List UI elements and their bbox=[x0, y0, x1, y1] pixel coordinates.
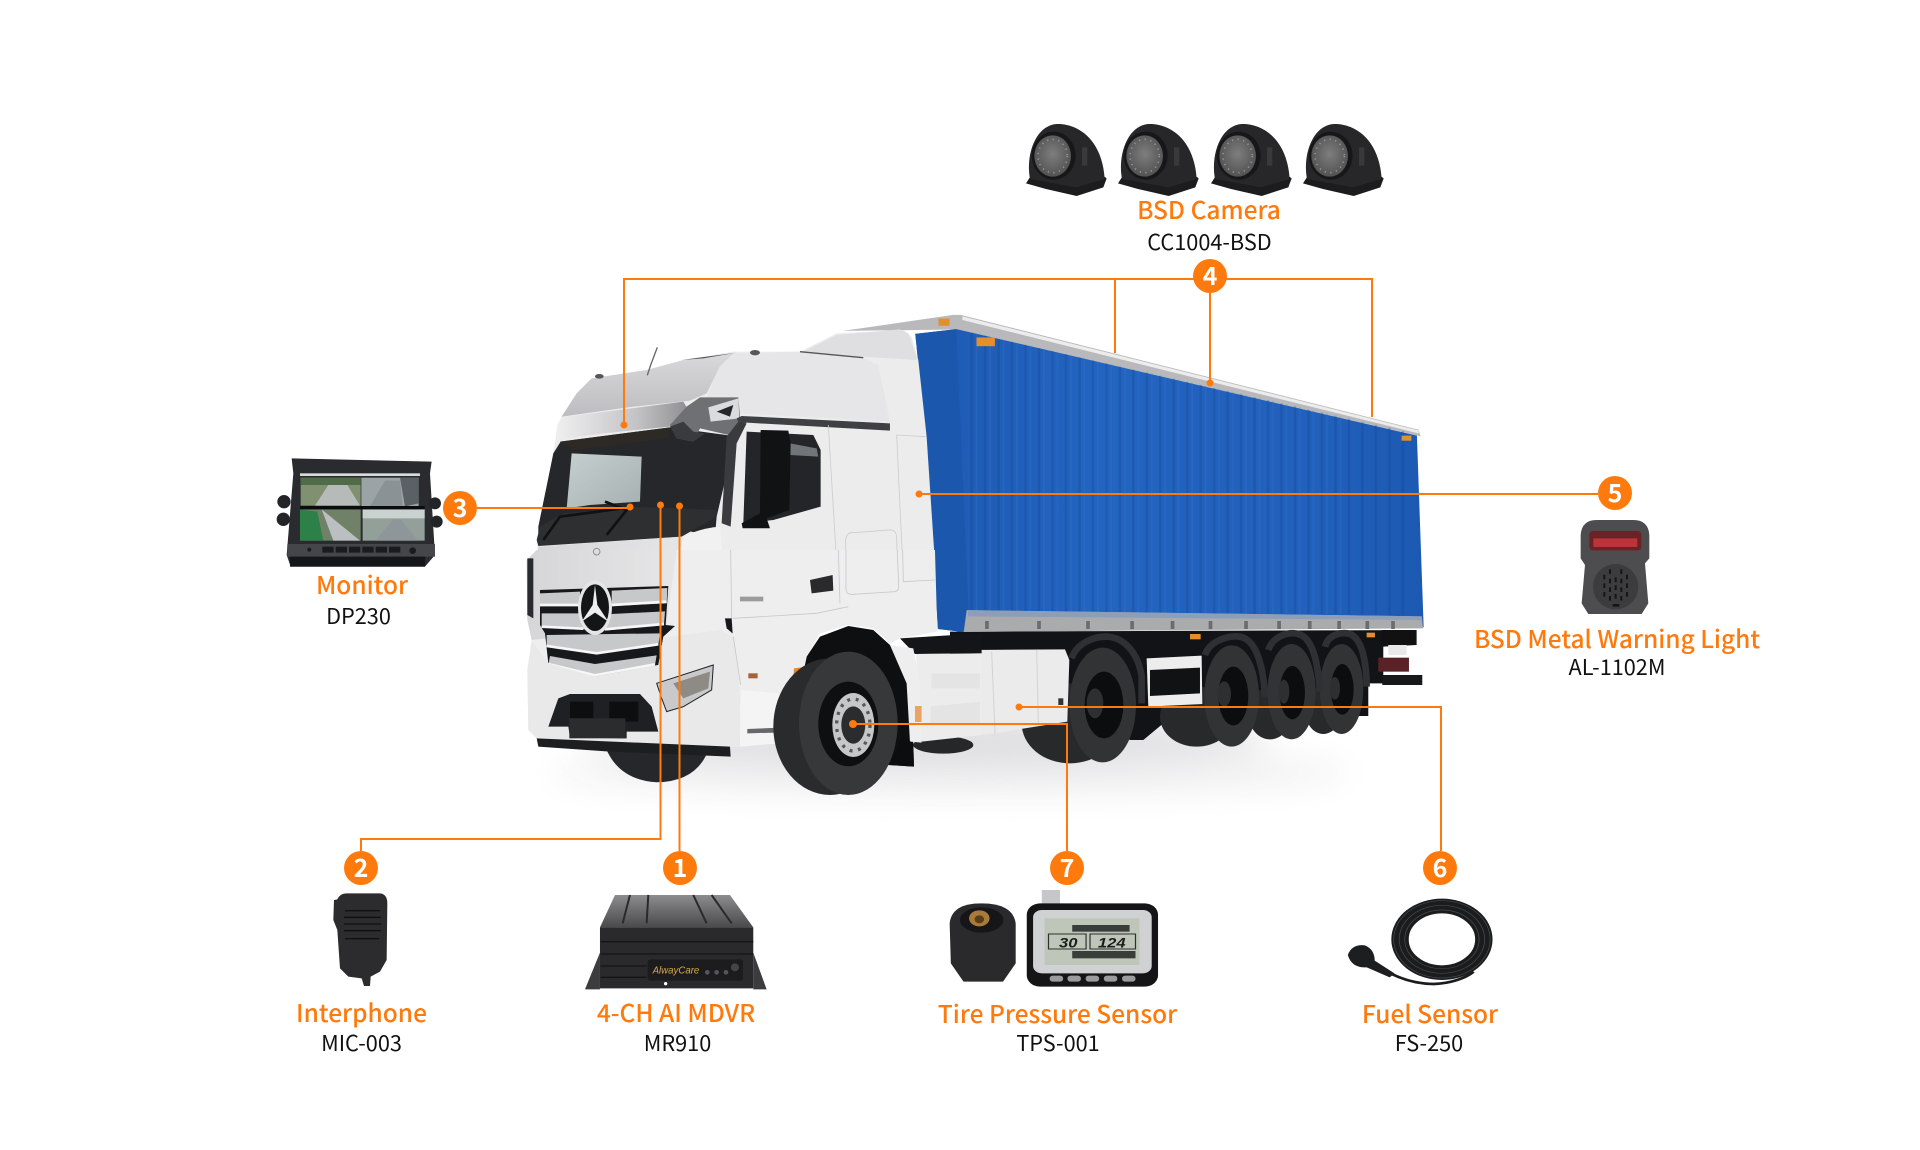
model: AL-1102M bbox=[1569, 651, 1665, 682]
seams bbox=[828, 425, 927, 563]
badge 5: 5 bbox=[1608, 474, 1622, 510]
heading: 4-CH AI MDVR bbox=[597, 995, 755, 1030]
badge 3 bbox=[443, 489, 477, 525]
top badge bbox=[593, 548, 600, 555]
badge 3: 3 bbox=[453, 489, 467, 525]
trailer roof rail bbox=[843, 315, 1421, 436]
badge 1 bbox=[663, 849, 697, 885]
badge 4 bbox=[1193, 257, 1227, 293]
heading: Fuel Sensor bbox=[1362, 996, 1499, 1031]
panel: interphone bbox=[296, 849, 427, 1058]
headlight bbox=[657, 665, 713, 712]
door band bbox=[737, 416, 890, 431]
side markers bbox=[748, 667, 922, 722]
trailer blue side bbox=[915, 329, 1424, 632]
side guard bar bbox=[1147, 656, 1202, 707]
panel: MDVR bbox=[585, 849, 767, 1058]
badge 2 bbox=[344, 849, 378, 885]
front face top bbox=[537, 537, 683, 563]
ground shadow bbox=[550, 716, 1350, 796]
rear lamp and bumper bbox=[1190, 630, 1422, 685]
model: MR910 bbox=[644, 1027, 711, 1058]
badge 7: 7 bbox=[1060, 849, 1074, 885]
icon: interphone bbox=[333, 893, 387, 986]
roof vents bbox=[595, 350, 760, 379]
antenna bbox=[647, 347, 657, 375]
side fender guard bbox=[890, 645, 922, 743]
badge 6 bbox=[1423, 849, 1457, 885]
model badge bbox=[740, 597, 763, 601]
badge 6: 6 bbox=[1433, 849, 1447, 885]
sun visor bbox=[557, 402, 688, 439]
front wheel bbox=[773, 652, 898, 795]
windscreen bbox=[538, 427, 733, 545]
dashboard band bbox=[537, 507, 717, 546]
mudguards bbox=[1072, 633, 1367, 703]
heading: BSD Metal Warning Light bbox=[1474, 621, 1760, 656]
door handle bbox=[810, 575, 833, 593]
side view mirror bbox=[742, 430, 791, 528]
icon: four cameras bbox=[1026, 124, 1384, 196]
badge 7 bbox=[1050, 849, 1084, 885]
icon: MDVR recorder: AlwayCare bbox=[652, 965, 700, 976]
roof deflector bbox=[803, 329, 918, 360]
lip bbox=[537, 738, 731, 757]
badge 2: 2 bbox=[354, 849, 368, 885]
roof bbox=[562, 353, 733, 417]
axle 2 bbox=[1022, 648, 1136, 763]
model: MIC-003 bbox=[321, 1027, 402, 1058]
heading: Monitor bbox=[316, 567, 409, 602]
grille dark base bbox=[540, 586, 675, 677]
door window bbox=[743, 432, 821, 523]
grille chrome slats bbox=[540, 588, 667, 676]
wheel arch bbox=[798, 626, 914, 767]
icon: tire pressure sensor and display: 124 bbox=[1098, 935, 1126, 951]
icon: MDVR recorder bbox=[585, 895, 767, 989]
step bbox=[740, 690, 798, 747]
axle 4 bbox=[1248, 644, 1316, 739]
inner front wheel bbox=[607, 747, 708, 782]
front lower bumper bbox=[527, 630, 740, 747]
connector lines bbox=[361, 279, 1598, 851]
badge 1: 1 bbox=[673, 849, 687, 885]
trailer markers bbox=[977, 337, 995, 346]
axle 3 bbox=[1160, 645, 1259, 747]
model: CC1004-BSD bbox=[1147, 226, 1272, 257]
model: FS-250 bbox=[1395, 1027, 1463, 1058]
chassis band and inner wheel bbox=[900, 633, 982, 754]
fuel tank rear bbox=[970, 649, 1069, 736]
panel: monitor bbox=[277, 458, 477, 631]
panel: tire pressure sensor bbox=[938, 849, 1178, 1058]
cab upper bbox=[537, 329, 935, 563]
icon: monitor bbox=[277, 458, 443, 567]
pillar bbox=[722, 422, 747, 527]
cab lower body bbox=[527, 550, 937, 747]
heading: Interphone bbox=[296, 995, 427, 1030]
badge 4: 4 bbox=[1203, 257, 1218, 293]
side mirror arm bbox=[670, 397, 740, 442]
mudflap bbox=[888, 737, 914, 767]
badge 5 bbox=[1598, 474, 1632, 510]
model: TPS-001 bbox=[1016, 1027, 1100, 1058]
trailer bbox=[843, 315, 1424, 632]
star logo bbox=[578, 580, 612, 635]
truck illustration bbox=[527, 315, 1424, 796]
air intake bbox=[548, 694, 658, 738]
panel: fuel sensor bbox=[1348, 849, 1499, 1058]
panel: warning light bbox=[1474, 474, 1760, 682]
model: DP230 bbox=[326, 600, 391, 631]
trailer side skirt bbox=[964, 610, 1423, 632]
fuel tank front bbox=[916, 653, 982, 742]
cab silhouette bbox=[537, 330, 935, 563]
icon: fuel sensor with coiled cable bbox=[1348, 901, 1490, 984]
heading: Tire Pressure Sensor bbox=[938, 996, 1178, 1031]
door seams bbox=[725, 550, 935, 685]
grille side slats bbox=[527, 558, 533, 618]
axle 5 bbox=[1305, 644, 1363, 734]
rear chassis and wheels bbox=[950, 630, 1422, 763]
icon: tire pressure sensor and display: 30 bbox=[1059, 935, 1078, 951]
panel: BSD camera bbox=[1026, 124, 1384, 293]
icon: warning light bbox=[1581, 520, 1649, 614]
front panel bbox=[527, 550, 677, 640]
icon: tire pressure sensor and display bbox=[950, 890, 1158, 987]
cab lower bbox=[527, 548, 982, 795]
heading: BSD Camera bbox=[1137, 192, 1281, 227]
